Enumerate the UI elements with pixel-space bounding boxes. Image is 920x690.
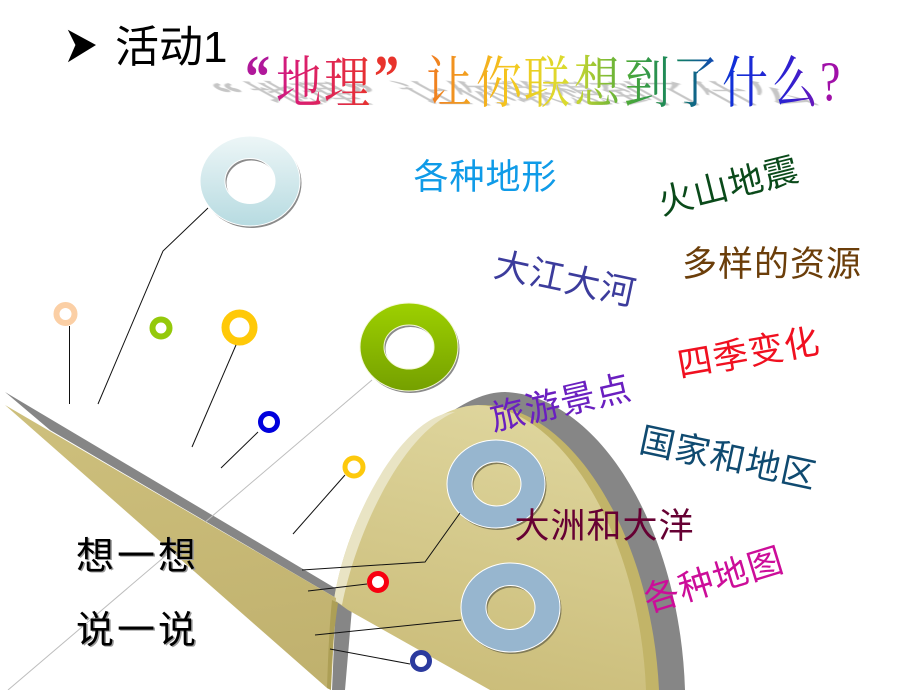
- prompt: think and discuss: 想一想: [78, 537, 201, 579]
- panel: olive fold strip: [327, 600, 338, 690]
- panel: tan wedge: [5, 405, 336, 690]
- label: 各种地图: 各种地图: [639, 541, 788, 620]
- label: 大洲和大洋: 大洲和大洋: [514, 507, 695, 546]
- label: 多样的资源: 多样的资源: [682, 245, 862, 284]
- ring: steel blue upper: [447, 440, 546, 530]
- prompt: think and discuss: [76, 536, 201, 653]
- ring: blue small: [260, 414, 278, 430]
- ring: red small: [370, 574, 386, 590]
- label: 各种地形: 各种地形: [413, 158, 558, 197]
- label: 火山地震: 火山地震: [654, 150, 803, 223]
- panel: gray dome back: [445, 392, 685, 690]
- ring: amber medium: [226, 314, 254, 342]
- heading: activity 1: 活动1: [115, 23, 227, 72]
- prompt: think and discuss: 想一想: [76, 536, 199, 578]
- ring: peach small: [56, 305, 74, 323]
- ring: green large: [360, 303, 460, 393]
- ring: navy small: [412, 652, 430, 670]
- title shadow: 地理让你联想到了什么: [233, 80, 830, 109]
- label: 四季变化: 四季变化: [674, 322, 823, 385]
- title text: “: [245, 44, 270, 112]
- ring: lime small: [152, 320, 170, 336]
- icon: arrow bullet: [69, 31, 95, 61]
- title: rainbow word art: [194, 44, 840, 116]
- label: 大江大河: 大江大河: [491, 246, 640, 314]
- connector: light gray long line: [8, 380, 372, 690]
- ring: yellow small: [345, 458, 363, 476]
- highlight: dome left edge: [334, 412, 455, 605]
- connectors: black leader lines: [70, 208, 461, 664]
- title text: ?: [820, 51, 840, 113]
- prompt: think and discuss: 说一说: [78, 611, 201, 653]
- ring: steel blue lower: [461, 563, 562, 654]
- panel: olive dome band: [440, 405, 659, 690]
- ring: pale blue large: [200, 136, 302, 228]
- title text: ”: [374, 44, 399, 112]
- panel: tan dome: [334, 405, 646, 690]
- panel: gray wedge shadow: [5, 392, 352, 690]
- prompt: think and discuss: 说一说: [76, 610, 199, 652]
- title text: 地理让你联想到了什么: [276, 53, 818, 116]
- label: 国家和地区: 国家和地区: [636, 421, 820, 496]
- title shadow: “”: [194, 77, 409, 108]
- label: 旅游景点: 旅游景点: [486, 368, 635, 439]
